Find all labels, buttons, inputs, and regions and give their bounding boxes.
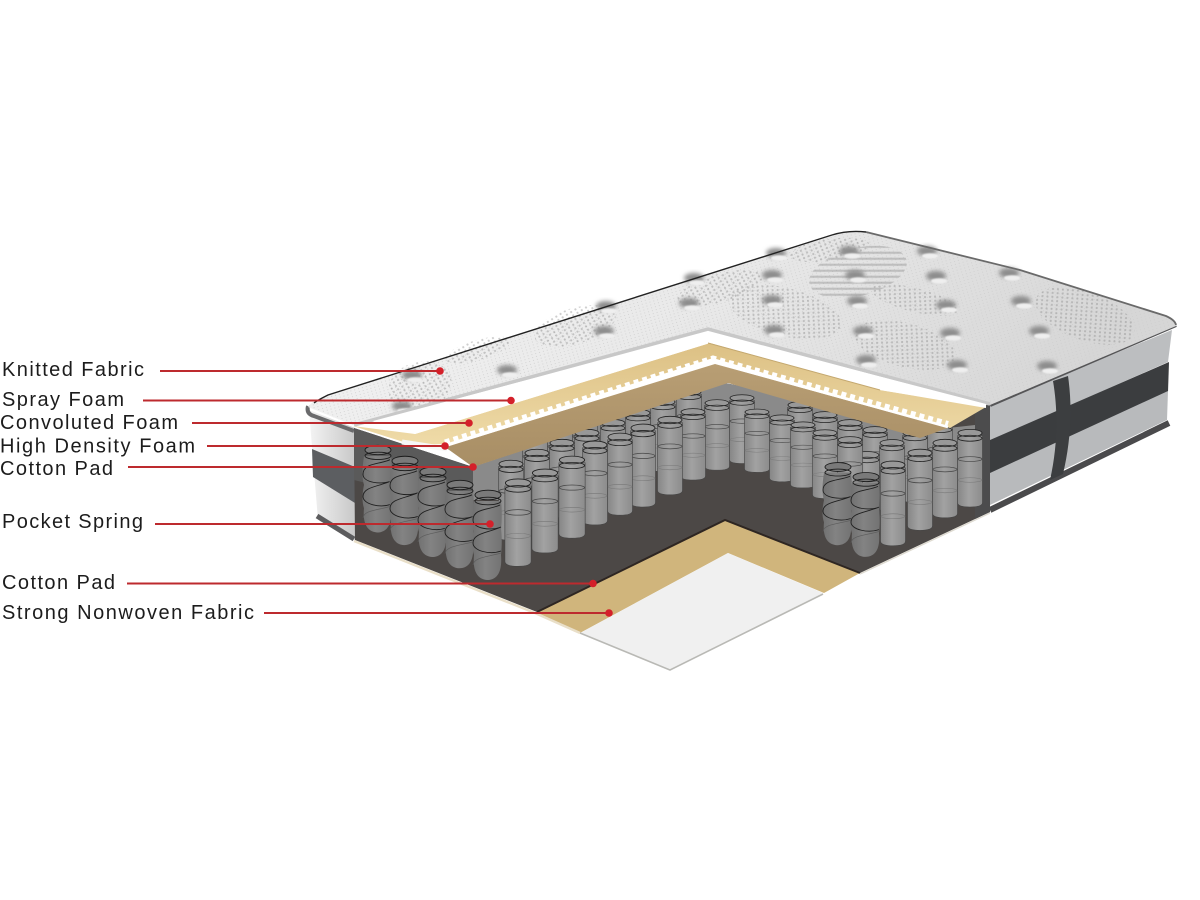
callout: strong nonwoven fabric: Strong Nonwoven Fabric [2,602,254,624]
callout: spray foam [2,389,515,411]
callout: upper cotton pad: Cotton Pad [0,458,113,480]
callout: lower cotton pad: Cotton Pad [2,572,115,594]
spray foam layer [373,332,986,434]
mattress cutaway illustration [308,231,1176,670]
spring cavity and floor [354,383,990,612]
callout: pocket spring [2,511,494,533]
high density foam layer [445,364,948,467]
tufts [402,370,423,383]
pocket springs [362,389,982,580]
callout: convoluted foam: Convoluted Foam [0,412,178,434]
callout: spray foam: Spray Foam [2,389,124,411]
piping along back edge [314,231,866,403]
right side panel [990,325,1176,510]
callout: strong nonwoven fabric [2,602,613,624]
strap on side [1050,376,1070,480]
callout: knitted fabric [2,359,444,381]
callout: upper cotton pad [0,458,477,480]
bottom cotton pad [535,520,860,633]
surface lip [354,329,990,425]
callout: knitted fabric: Knitted Fabric [2,359,144,381]
top surface knitted fabric [308,231,1176,425]
left side panel [308,406,355,540]
knit patches [383,234,1142,418]
bottom nonwoven fabric [354,513,990,670]
callout: convoluted foam [0,412,473,434]
callout: lower cotton pad [2,572,597,594]
callout: high density foam: High Density Foam [0,436,195,458]
callout: pocket spring: Pocket Spring [2,511,143,533]
callout: high density foam [0,436,449,458]
convoluted foam layer [353,343,986,449]
